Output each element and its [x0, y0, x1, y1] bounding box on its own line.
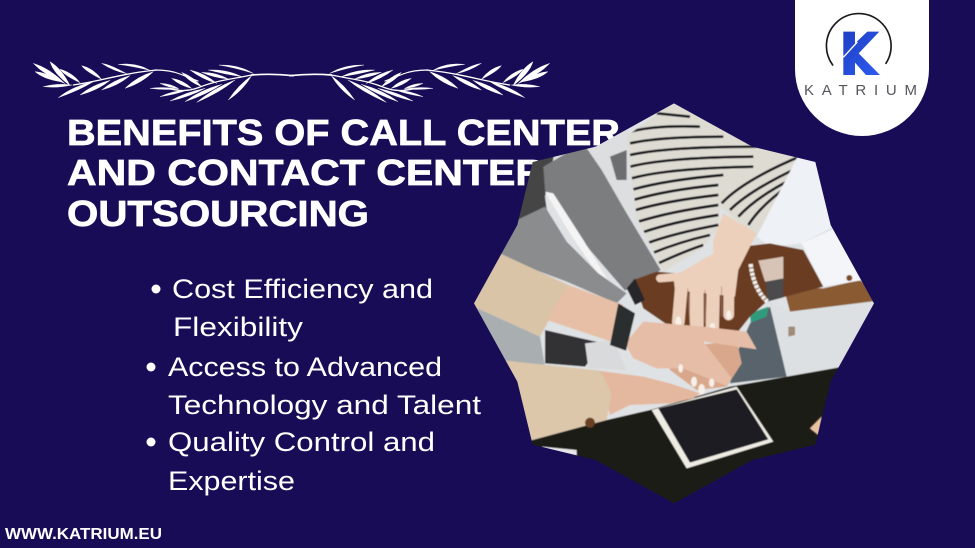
logo badge	[795, 0, 929, 136]
bullet: advanced technology: Access to Advanced	[168, 352, 442, 382]
white shirt right	[757, 155, 837, 247]
title: OUTSOURCING	[67, 193, 369, 234]
bullet: quality control: Quality Control and	[168, 427, 435, 457]
lower hand	[625, 322, 757, 386]
hidden middle fingers	[665, 340, 742, 390]
gray lower coat	[476, 308, 545, 366]
trousers	[730, 307, 787, 383]
white cuff	[802, 228, 863, 287]
forearm bottom	[598, 371, 700, 415]
background behind suit	[577, 127, 662, 270]
right floor	[770, 297, 883, 377]
title: AND CONTACT CENTER	[67, 152, 545, 193]
striped shirt	[627, 104, 798, 271]
photo: team stacking hands in star frame	[474, 104, 874, 504]
fingertips lower	[678, 364, 683, 373]
title: BENEFITS OF CALL CENTER	[67, 112, 620, 153]
bullet list	[146, 274, 482, 496]
dark background left	[518, 156, 554, 220]
gray suit arm lower	[500, 207, 627, 303]
logo wordmark: KATRIUM	[804, 82, 917, 99]
beige sleeve bottom	[500, 360, 612, 442]
bullet: cost efficiency: Cost Efficiency and	[172, 274, 433, 304]
title	[67, 112, 620, 234]
light hand	[660, 213, 757, 337]
bullet: quality control: Expertise	[168, 466, 295, 496]
icon: K logo mark	[826, 14, 891, 75]
bullet: advanced technology	[146, 352, 482, 420]
watch	[758, 257, 783, 282]
black watch strap	[610, 303, 635, 351]
white strip	[544, 191, 606, 279]
brown sideboard	[786, 280, 873, 312]
website url: WWW.KATRIUM.EU	[5, 526, 162, 543]
decorative laurel branch	[33, 62, 550, 102]
bullet: cost efficiency: Flexibility	[173, 312, 304, 342]
bullet: quality control	[146, 427, 435, 496]
forearm left	[547, 285, 623, 343]
bullet: cost efficiency	[152, 274, 433, 342]
bottom table	[527, 367, 843, 513]
bead bracelet	[751, 264, 767, 302]
notebook	[652, 387, 773, 468]
gray suit arm upper	[543, 143, 661, 291]
dark arm and hand	[633, 243, 823, 333]
bullet: advanced technology: Technology and Talent	[168, 390, 482, 420]
beige sleeve left	[467, 253, 568, 337]
